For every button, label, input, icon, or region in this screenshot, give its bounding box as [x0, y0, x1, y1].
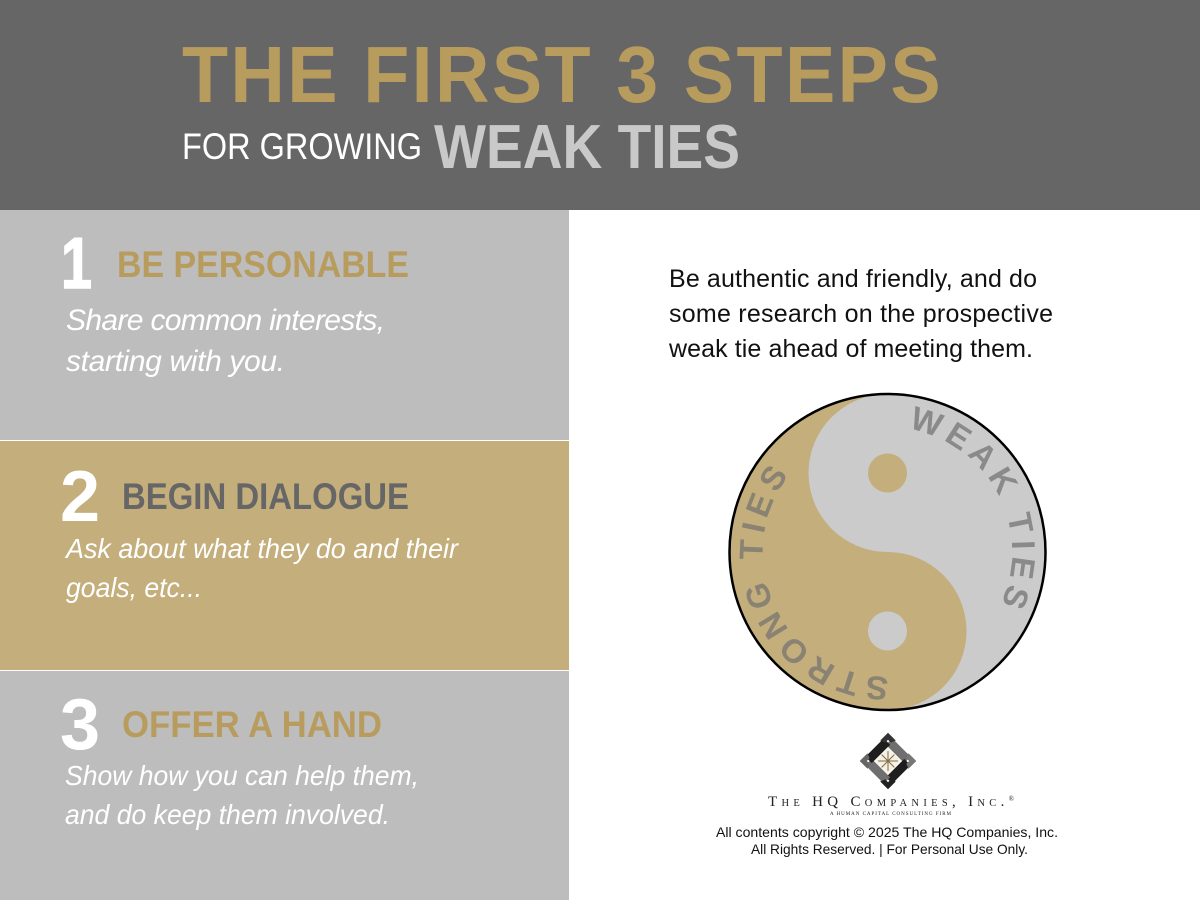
description text: Be authentic and friendly, and do [669, 265, 1037, 293]
label: strong ties: STRONG TIES [740, 466, 888, 700]
description text: some research on the prospective [669, 300, 1053, 328]
description text [668, 265, 1053, 363]
step 2 text: goals, etc... [66, 572, 202, 603]
step 2 heading: BEGIN DIALOGUE [122, 476, 409, 517]
step 1 text: starting with you. [66, 345, 285, 378]
copyright footer: All contents copyright © 2025 The HQ Companies, Inc. [716, 824, 1058, 840]
title: THE FIRST 3 STEPS [182, 30, 943, 119]
yin-yang diagram [728, 392, 1047, 712]
step number 3: 3 [60, 685, 100, 765]
company name [768, 794, 1015, 817]
step 1 text [66, 304, 385, 378]
step 2 text [64, 533, 460, 603]
label: weak ties: WEAK TIES [914, 406, 1035, 608]
company name: ® [1009, 795, 1015, 803]
copyright footer: All Rights Reserved. | For Personal Use Only. [751, 841, 1028, 857]
panel: step 1 [0, 210, 569, 440]
tagline: A HUMAN CAPITAL CONSULTING FIRM [830, 812, 952, 817]
step 2 text: Ask about what they do and their [64, 533, 460, 564]
panel: step 3 [0, 671, 569, 900]
step number 1: 1 [61, 224, 92, 304]
step 1 text: Share common interests, [66, 304, 385, 337]
step 3 heading: OFFER A HAND [122, 704, 382, 745]
panel: step 2 [0, 441, 569, 670]
header band [0, 0, 1200, 210]
step 1 heading: BE PERSONABLE [117, 244, 409, 285]
description text: weak tie ahead of meeting them. [668, 335, 1033, 363]
company name: T HE HQ C OMPANIES , I NC . [768, 794, 1004, 810]
step 3 text: and do keep them involved. [65, 799, 390, 830]
subtitle emphasis: WEAK TIES [434, 113, 740, 182]
step number 2: 2 [60, 457, 100, 537]
subtitle: FOR GROWING [182, 126, 422, 167]
step 3 text: Show how you can help them, [65, 760, 419, 791]
step 3 text [65, 760, 419, 830]
copyright footer [716, 824, 1058, 857]
icon: company logo [860, 733, 916, 789]
